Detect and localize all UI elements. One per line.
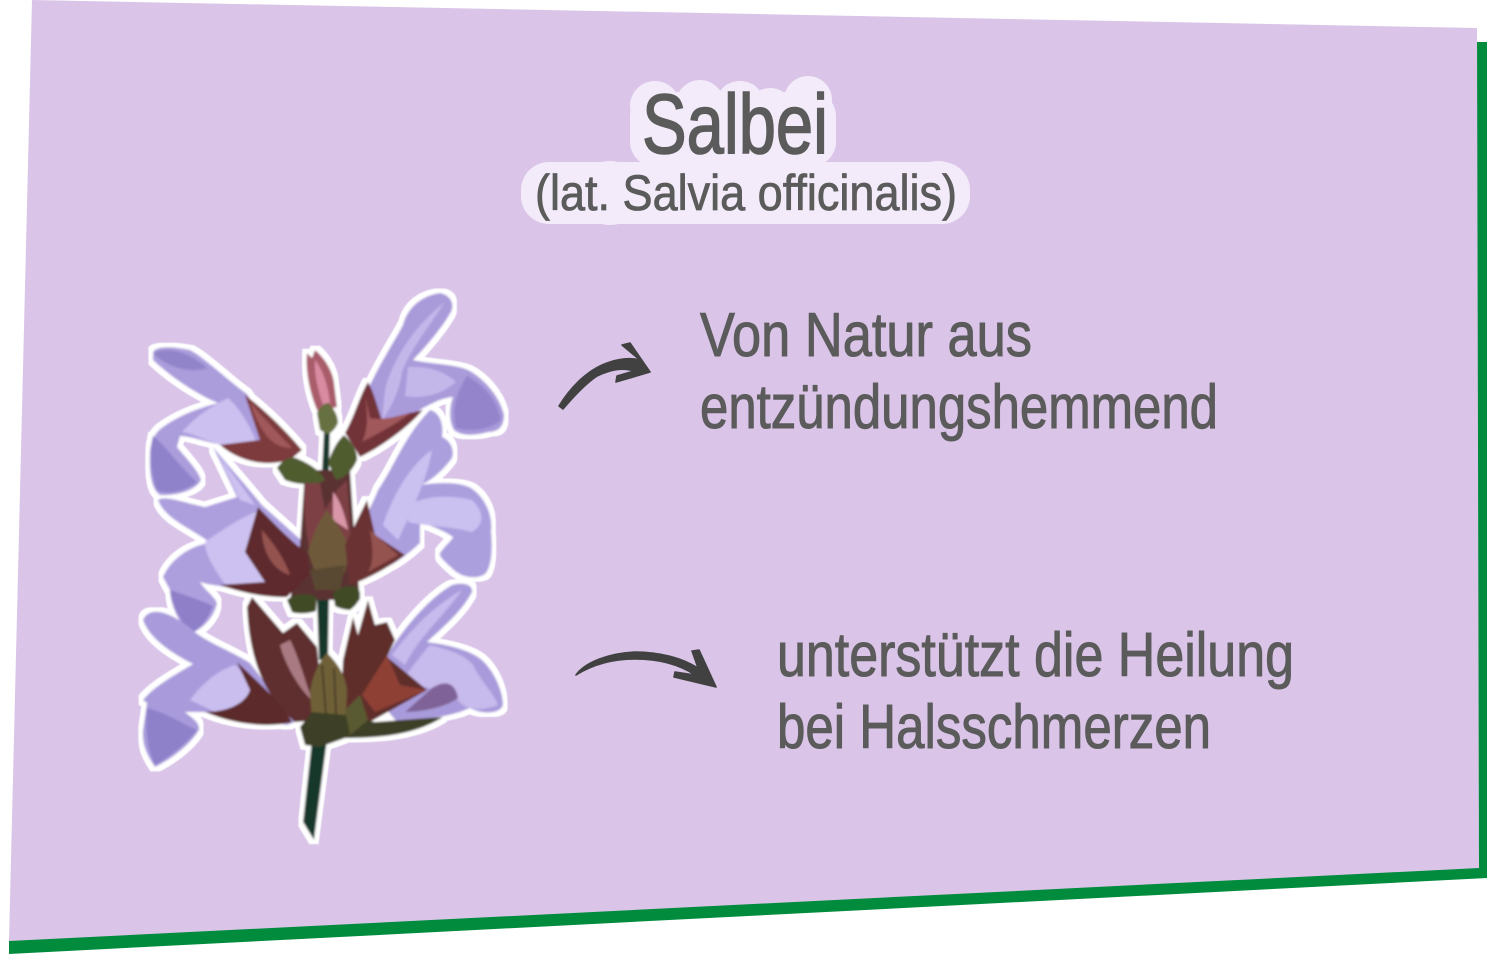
top-left flower petals	[150, 347, 280, 495]
text: benefit two	[777, 621, 1294, 762]
heading: Salbei: Salbei	[642, 77, 828, 171]
subtitle: Latin name: (lat. Salvia officinalis)	[535, 165, 957, 221]
bottom-left flower petals	[143, 612, 295, 767]
central dark core	[290, 470, 360, 600]
bottom calyx spikes	[247, 597, 325, 722]
bottom-right flower petals	[370, 584, 503, 722]
title block	[521, 76, 970, 225]
text: benefit two: bei Halsschmerzen	[777, 693, 1211, 762]
title halo	[521, 76, 970, 225]
top calyces	[345, 382, 423, 457]
middle-right flower petals	[350, 410, 492, 577]
top green buds	[277, 435, 357, 484]
arrow: to first benefit	[559, 343, 650, 409]
text: benefit one: entzündungshemmend	[700, 373, 1218, 442]
text: benefit one	[700, 301, 1218, 442]
top bud	[307, 350, 337, 412]
arrow: to second benefit	[576, 650, 716, 687]
text: benefit one: Von Natur aus	[700, 301, 1032, 370]
bottom base	[300, 712, 443, 747]
text: benefit two: unterstützt die Heilung	[777, 621, 1294, 690]
top-right flower petals	[360, 293, 504, 435]
middle calyces	[220, 507, 309, 597]
middle-left flower petals	[158, 447, 310, 634]
stems	[303, 430, 330, 840]
centre calyx	[304, 480, 351, 552]
bottom central bud	[310, 653, 347, 725]
illustration: sage flower	[143, 293, 504, 840]
